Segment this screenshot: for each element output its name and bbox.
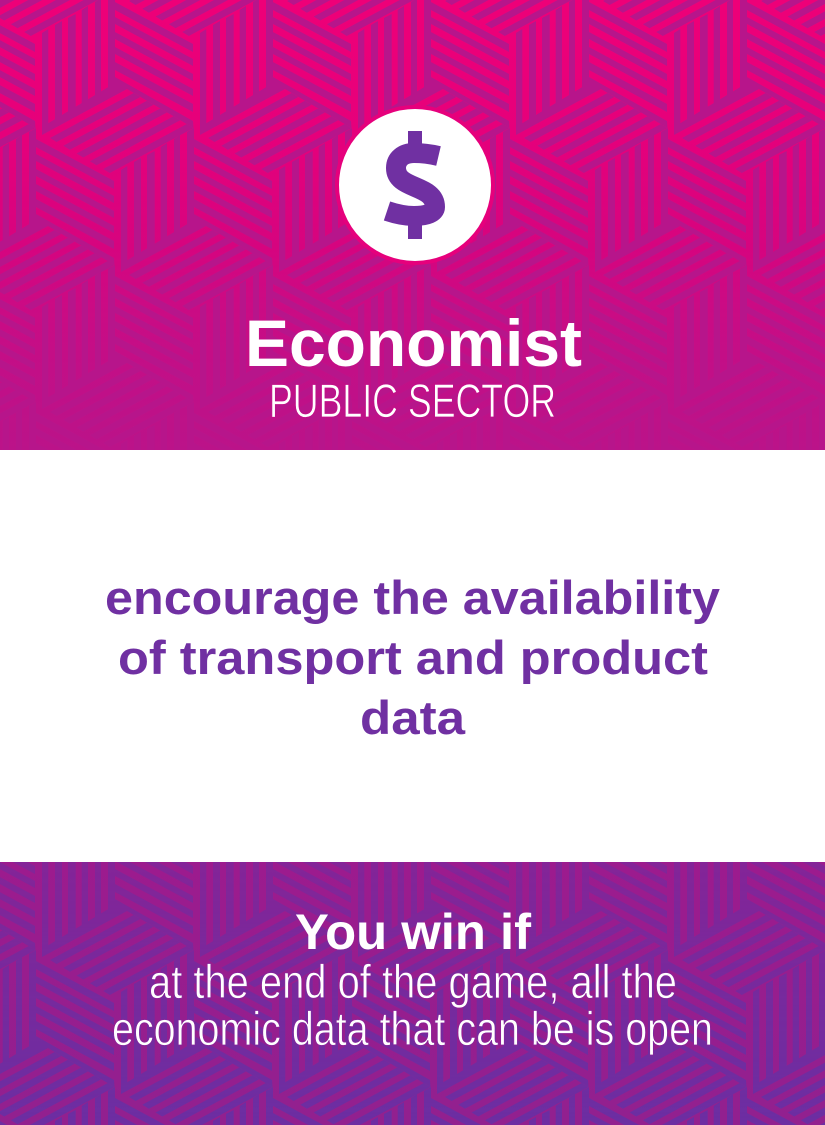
title: Economist: Economist [245,306,582,380]
icon: dollar sign in circle [337,107,493,263]
text block: win condition: You win if [295,904,531,960]
text block: win condition: economic data that can be is open [112,1002,713,1055]
text block: objective [105,571,720,744]
text block: objective: of transport and product [118,631,708,684]
text block: objective: encourage the availability [105,571,720,624]
text block: objective: data [360,691,466,744]
panel: header band [0,0,825,450]
text block: win condition [112,904,713,1055]
text block: win condition: at the end of the game, all the [149,955,677,1008]
subtitle: public sector: PUBLIC SECTOR [269,374,556,427]
panel: win condition band [0,862,825,1125]
